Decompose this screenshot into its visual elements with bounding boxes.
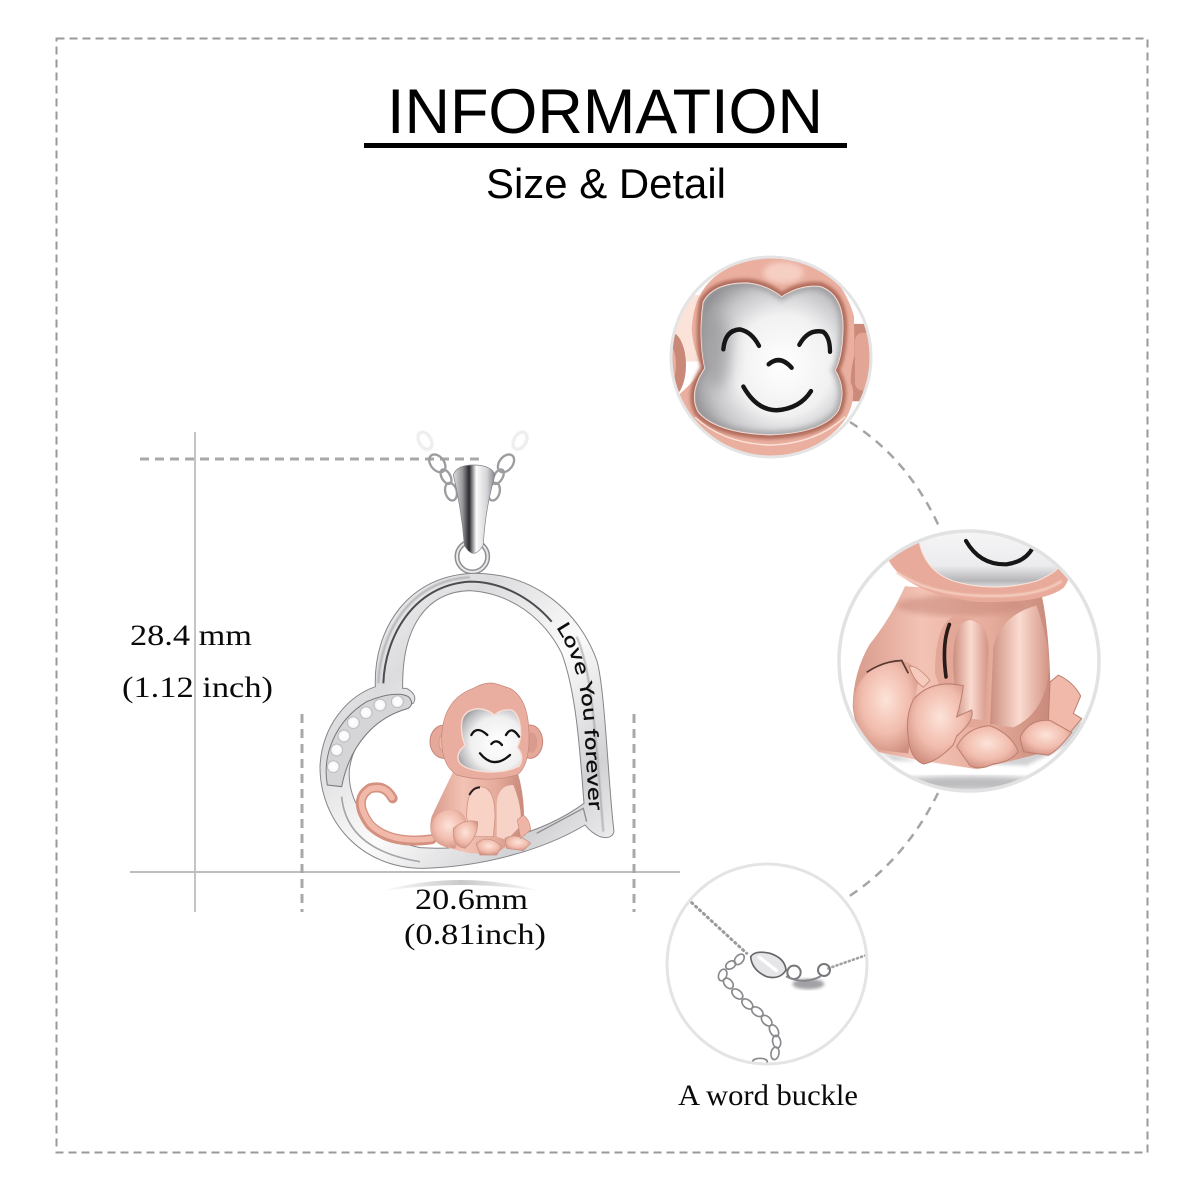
bail bbox=[453, 465, 495, 553]
height label: 28.4 mm bbox=[130, 619, 252, 652]
width marker arc bbox=[378, 880, 545, 892]
width label bbox=[404, 883, 546, 951]
detail circle: monkey body bbox=[835, 525, 1105, 800]
width label: 20.6mm bbox=[415, 883, 528, 916]
monkey tail bbox=[361, 787, 432, 841]
necklace pendant bbox=[320, 430, 614, 869]
monkey bbox=[430, 683, 543, 855]
height label bbox=[122, 619, 273, 704]
heart frame bbox=[320, 573, 614, 868]
gemstone crescent bbox=[326, 694, 412, 787]
title: INFORMATION bbox=[387, 77, 823, 147]
height label: (1.12 inch) bbox=[122, 671, 273, 704]
subtitle: Size & Detail bbox=[486, 160, 726, 207]
dimension lines bbox=[130, 432, 680, 912]
width label: (0.81inch) bbox=[404, 918, 546, 951]
detail circle: monkey face bbox=[670, 256, 872, 458]
engraved text bbox=[556, 627, 589, 809]
frame shading bbox=[342, 577, 603, 862]
necklace pendant: Love You forever bbox=[557, 622, 600, 810]
buckle caption: A word buckle bbox=[678, 1079, 858, 1112]
connector: body to buckle bbox=[848, 793, 938, 897]
title underline bbox=[364, 143, 847, 148]
connector: face to body bbox=[850, 422, 941, 531]
chain bbox=[415, 430, 530, 502]
jump ring bbox=[457, 541, 488, 572]
detail circle: lobster clasp chain bbox=[660, 860, 875, 1070]
